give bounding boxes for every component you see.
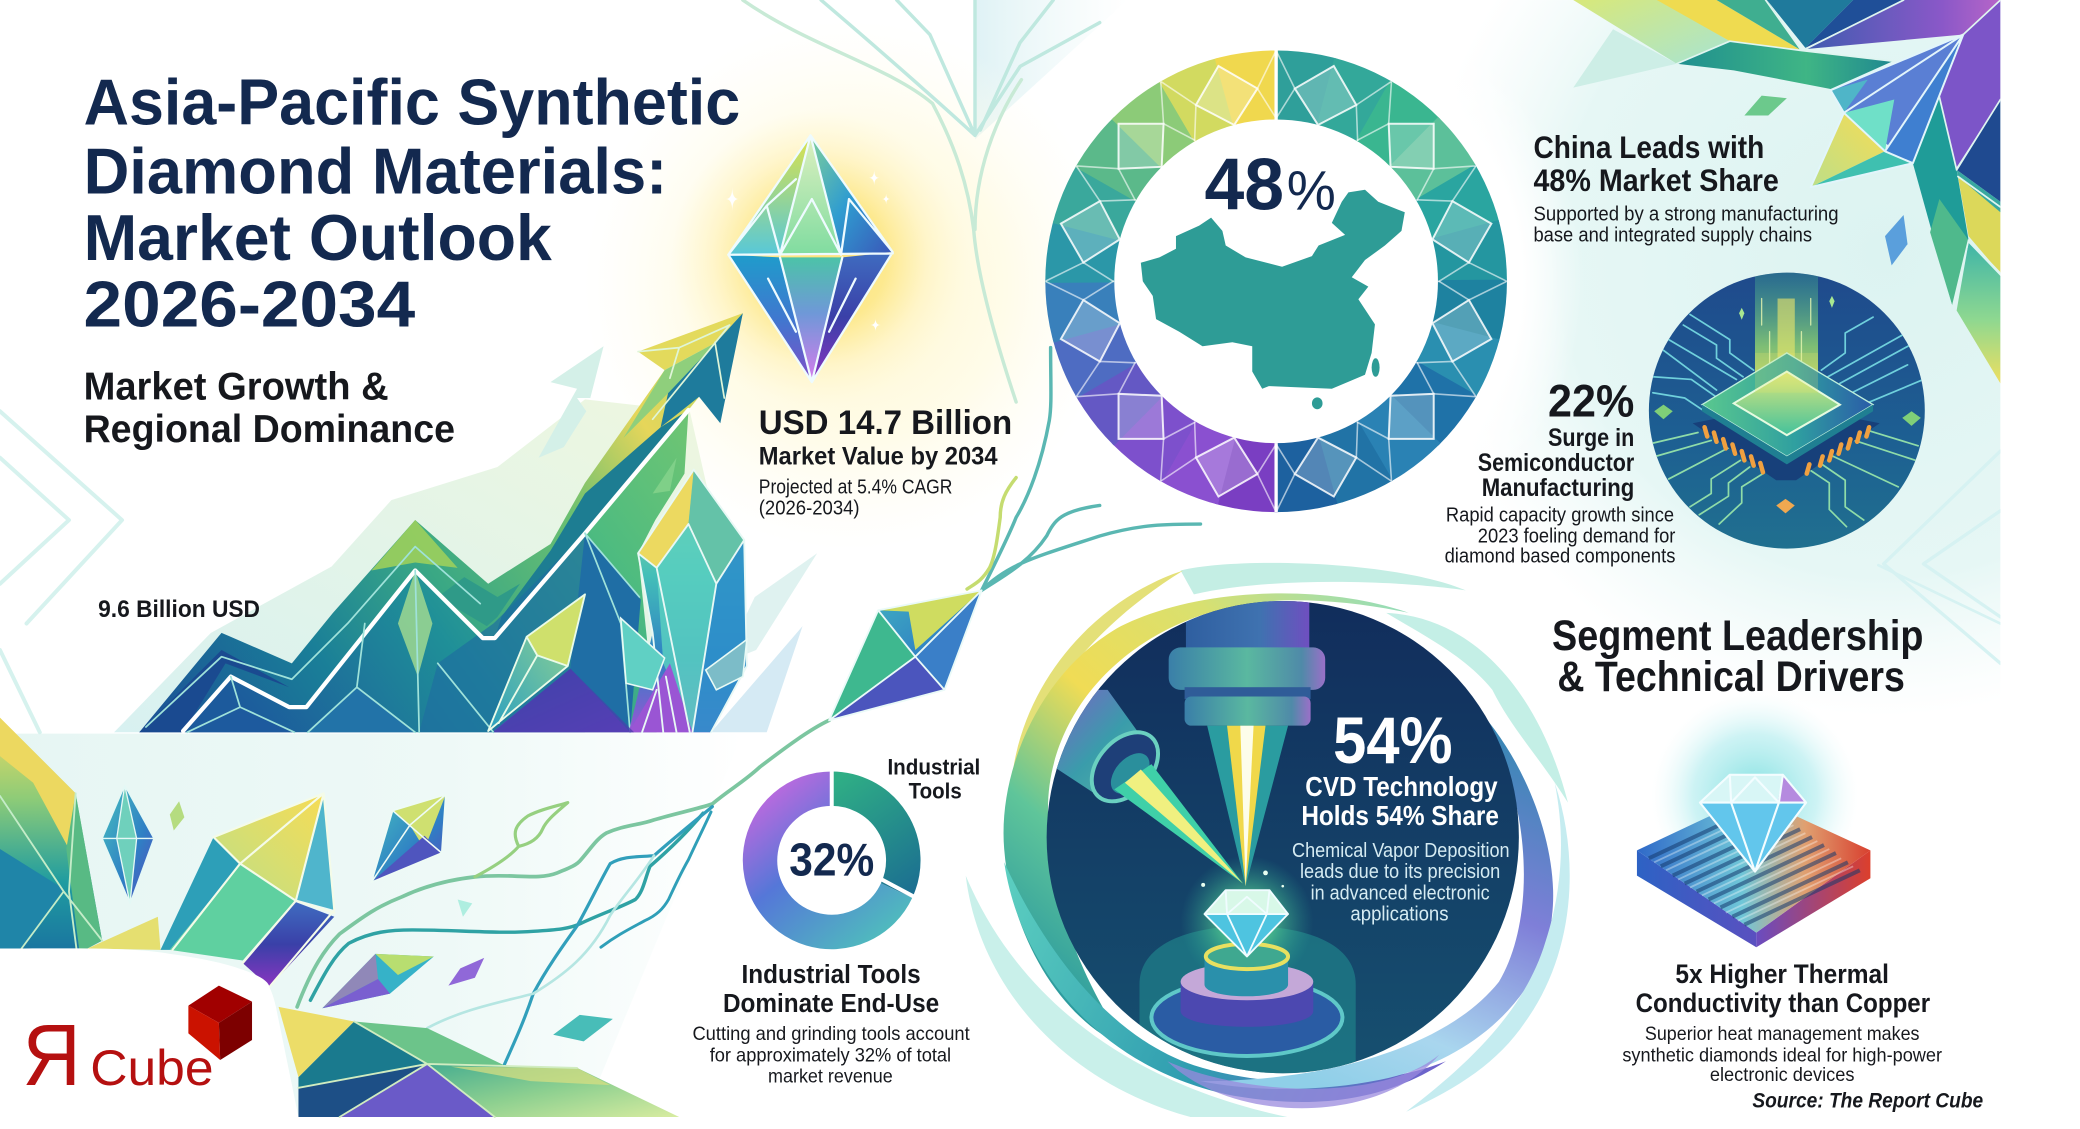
- panel: China market share ring: [1035, 40, 1517, 522]
- trend lines: [183, 410, 688, 731]
- large gem: [161, 793, 334, 987]
- vine: pale branch: [427, 856, 654, 1028]
- light facet lines: [146, 533, 639, 732]
- icon: heat sink with diamond: [1637, 693, 1870, 947]
- subtitle: Regional Dominance: [84, 408, 455, 451]
- lower right purple ground: [493, 669, 634, 732]
- text: 22% semiconductor surge: 22%: [1548, 376, 1634, 427]
- white backing: [0, 948, 298, 1117]
- chip pins: [1705, 427, 1869, 474]
- growth arrow: [623, 313, 743, 438]
- pale arrow: [539, 346, 604, 458]
- callout: USD 14.7 Billion: Projected at 5.4% CAGR: [759, 477, 952, 499]
- CVD text: applications: [1350, 904, 1449, 926]
- callout: USD 14.7 Billion: (2026-2034): [759, 498, 860, 520]
- CVD text: leads due to its precision: [1300, 861, 1500, 883]
- bottom terrain: [279, 1007, 679, 1117]
- label: industrial tools: [887, 755, 980, 804]
- vine: upper right: [982, 348, 1201, 590]
- CVD text: Chemical Vapor Deposition: [1292, 840, 1510, 862]
- pale backdrop: [114, 399, 723, 732]
- text: thermal conductivity: Superior heat management makes: [1645, 1024, 1919, 1045]
- dark ridge base: [139, 650, 289, 732]
- 48% figure: 48: [1204, 145, 1284, 226]
- text: industrial tools dominate: Dominate End-Use: [723, 990, 939, 1018]
- text: China leads: China Leads with: [1533, 129, 1764, 165]
- text: industrial tools dominate: Industrial Tools: [742, 961, 921, 989]
- pale gem: [458, 899, 472, 917]
- sparkles: [726, 170, 890, 332]
- faceted ring: [1035, 40, 1517, 522]
- CVD text: CVD Technology: [1305, 771, 1498, 802]
- text: industrial tools dominate: [692, 961, 970, 1088]
- small crystal centre: [621, 618, 665, 690]
- area below trend line: [183, 410, 688, 732]
- panel: CVD technology: [966, 563, 1570, 1129]
- text: 22% semiconductor surge: Manufacturing: [1482, 475, 1634, 502]
- text: thermal conductivity: [1622, 959, 1943, 1086]
- tall crystal: [629, 470, 747, 732]
- shaded band: [495, 410, 688, 638]
- text: thermal conductivity: synthetic diamonds ideal for high-power: [1622, 1045, 1943, 1066]
- sparkles: [1201, 871, 1284, 888]
- cube icon: [188, 986, 252, 1060]
- text: thermal conductivity: electronic devices: [1710, 1065, 1854, 1086]
- ring interior: [1114, 119, 1438, 443]
- side nozzle: [1056, 690, 1137, 792]
- glow: [1652, 693, 1858, 899]
- text: China leads: Supported by a strong manufacturing: [1533, 203, 1839, 225]
- label: industrial tools: Industrial: [887, 755, 980, 780]
- gem: [728, 135, 893, 382]
- title: Market Outlook: [84, 201, 553, 274]
- CVD text: Holds 54% Share: [1301, 800, 1499, 831]
- small crystal left: [488, 594, 585, 731]
- vine: leaf loop: [475, 803, 568, 877]
- decorative vines: centre network: [297, 348, 1201, 1065]
- vine: green branch: [297, 720, 829, 1007]
- side beam: [1114, 764, 1243, 884]
- text: thermal conductivity: 5x Higher Thermal: [1675, 959, 1889, 989]
- low gem: [322, 954, 434, 1008]
- CVD text: in advanced electronic: [1311, 882, 1490, 904]
- small yellow crystal: [88, 917, 161, 950]
- glow: [671, 110, 968, 407]
- swirl bands: [966, 563, 1570, 1129]
- floating gem: [371, 795, 446, 882]
- text: China leads: base and integrated supply chains: [1533, 224, 1812, 246]
- mountain ridge: [139, 370, 699, 732]
- text: 22% semiconductor surge: Semiconductor: [1478, 450, 1635, 477]
- dark circle: [1047, 601, 1519, 1073]
- icon: semiconductor chip circle: [1649, 271, 1925, 549]
- title: Diamond Materials:: [84, 135, 667, 208]
- pedestal glow: [1139, 926, 1356, 1075]
- text: China leads: [1533, 129, 1839, 246]
- beam from column: [1207, 726, 1288, 886]
- heading: segment leadership: & Technical Drivers: [1557, 653, 1905, 700]
- facet crystal: [1811, 35, 1963, 187]
- 48% figure: %: [1287, 160, 1336, 222]
- text: thermal conductivity: Conductivity than Copper: [1636, 988, 1930, 1018]
- title: [84, 66, 740, 340]
- small crystal right: [706, 639, 747, 690]
- background vines: top centre: [743, 0, 1100, 402]
- text: 22% semiconductor surge: diamond based components: [1445, 546, 1675, 568]
- text: industrial tools dominate: Cutting and grinding tools account: [692, 1024, 970, 1045]
- vine: blue branch: [504, 807, 712, 1065]
- China map: [1141, 190, 1405, 409]
- heat sink: [1637, 796, 1870, 947]
- CVD text: [1292, 704, 1510, 926]
- decorative crystal: top right: [1573, 0, 2000, 383]
- subtitle: [84, 365, 455, 451]
- heading: segment leadership: [1552, 612, 1923, 700]
- callout: USD 14.7 Billion: Market Value by 2034: [759, 443, 998, 470]
- crystal on the vine: [829, 590, 982, 720]
- text: 22% semiconductor surge: Rapid capacity growth since: [1446, 504, 1674, 526]
- wordmark: Cube: [90, 1039, 214, 1096]
- vine: lower loop: [601, 812, 711, 947]
- text: 22% semiconductor surge: 2023 foeling demand for: [1478, 526, 1676, 548]
- upper circuit traces: [1653, 314, 1923, 411]
- wordmark: [23, 1006, 214, 1104]
- label: 9.6 Billion USD: 9.6 Billion USD: [98, 596, 260, 623]
- big diamond above the chart: [671, 110, 968, 407]
- vine: yellow curl: [967, 478, 1016, 589]
- decorative crystals: bottom left: [0, 718, 679, 1117]
- heading: segment leadership: Segment Leadership: [1552, 612, 1923, 659]
- chip package: [1693, 419, 1880, 480]
- text: China leads: 48% Market Share: [1533, 162, 1779, 198]
- source note: Source: The Report Cube: [1752, 1090, 1983, 1113]
- vine: teal branch: [310, 813, 703, 1000]
- subtitle: Market Growth &: [84, 365, 389, 408]
- pedestal: [1151, 979, 1342, 1056]
- callout: USD 14.7 Billion: [759, 404, 1012, 520]
- title: Asia-Pacific Synthetic: [84, 66, 740, 139]
- column: [1186, 601, 1310, 648]
- chart: industrial tools donut: 32%: [789, 834, 874, 886]
- chart: industrial tools donut: [760, 769, 919, 932]
- text: 22% semiconductor surge: [1445, 376, 1676, 568]
- small gem: [102, 785, 154, 903]
- callout: USD 14.7 Billion: USD 14.7 Billion: [759, 404, 1012, 442]
- valley facets: [187, 458, 677, 732]
- large left shard: [0, 718, 102, 953]
- teal chip: [553, 1015, 613, 1041]
- diamond: [1700, 775, 1806, 872]
- text: industrial tools dominate: for approximately 32% of total: [710, 1045, 951, 1066]
- title: 2026-2034: [84, 267, 415, 340]
- text: industrial tools dominate: market revenue: [768, 1067, 893, 1088]
- logo patch: [0, 948, 298, 1117]
- wordmark: Я: [23, 1006, 81, 1104]
- peak cap: [371, 520, 458, 570]
- lower circuit traces: [1653, 431, 1918, 527]
- 48% figure: [1204, 145, 1336, 226]
- purple chip: [448, 958, 484, 986]
- CVD text: 54%: [1333, 704, 1453, 778]
- small diamonds: [1654, 296, 1921, 513]
- label: industrial tools: Tools: [909, 779, 962, 804]
- text: 22% semiconductor surge: Surge in: [1548, 425, 1634, 452]
- growth chart: mountains, arrow and crystals: [114, 313, 817, 732]
- tiny gem: [170, 801, 184, 830]
- growing diamond: [1206, 915, 1286, 954]
- light beam: [1755, 272, 1818, 372]
- pale shards: [711, 553, 817, 732]
